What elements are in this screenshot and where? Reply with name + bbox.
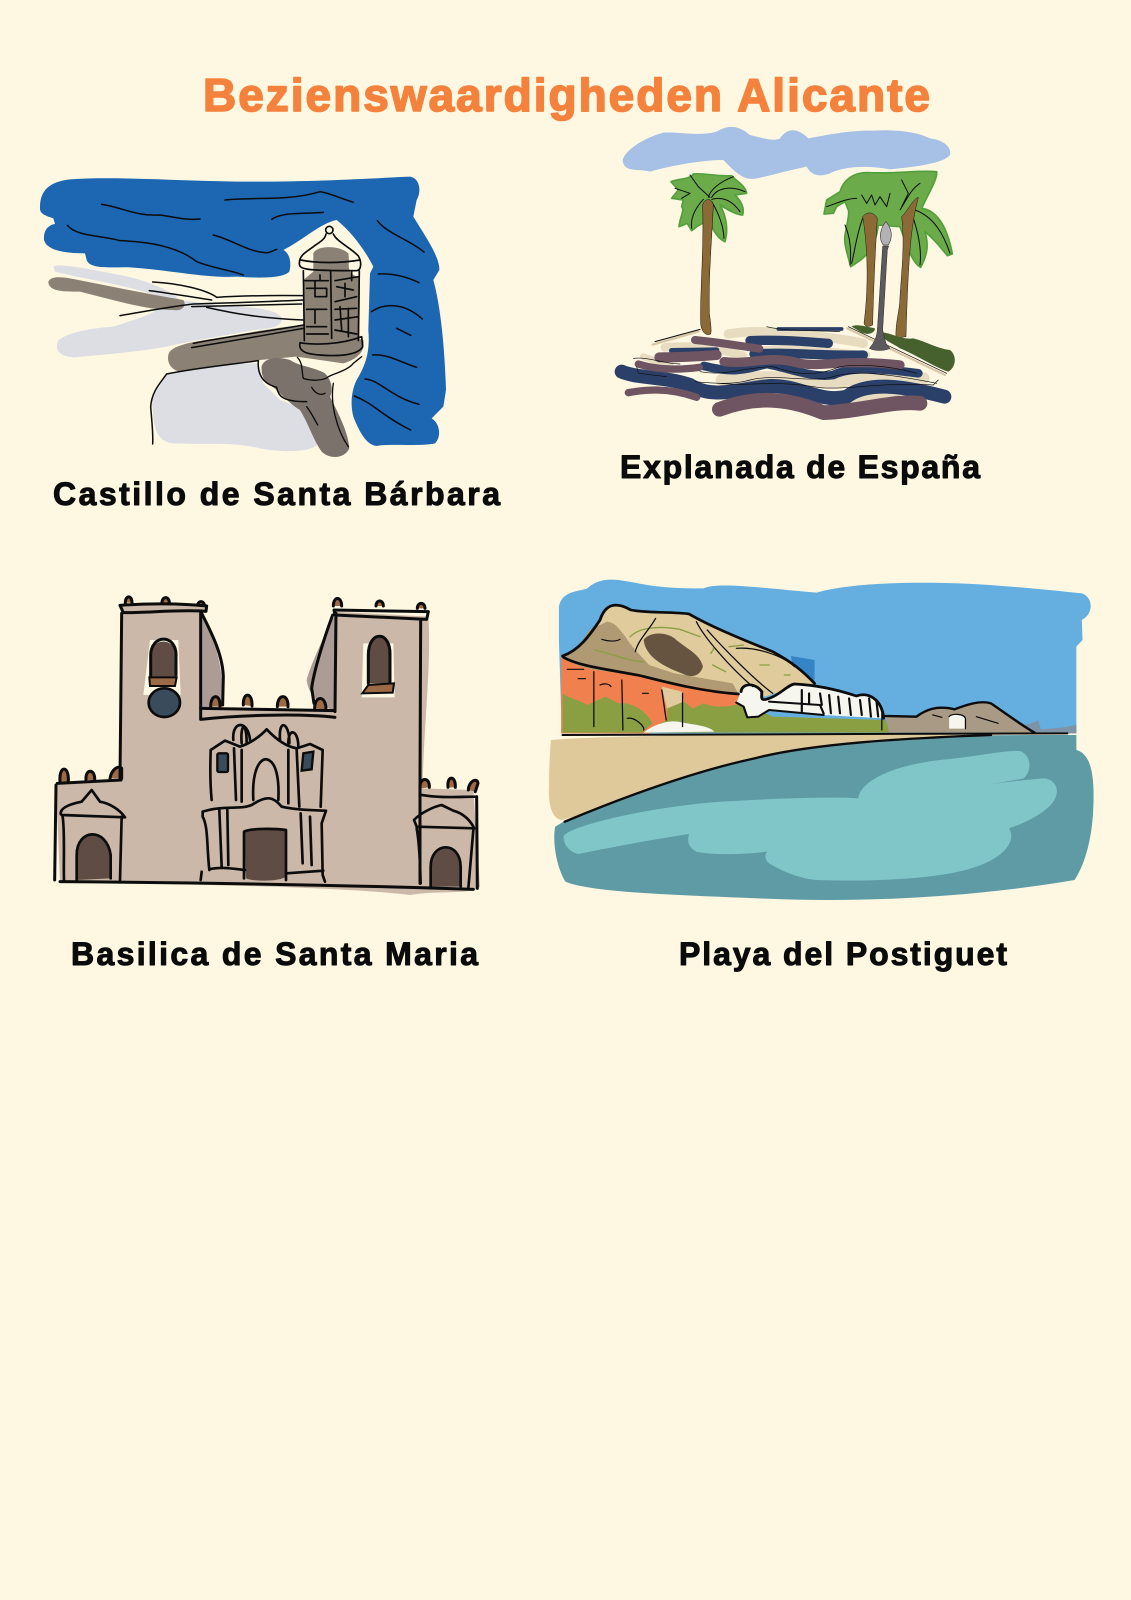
green brush marks [595, 627, 790, 675]
paving waves navy [622, 329, 944, 398]
hedge [852, 325, 955, 372]
pale grey wall strokes [53, 265, 318, 451]
rampart and cliff lines [120, 282, 307, 444]
watchtower body [303, 247, 360, 358]
white buildings [644, 684, 965, 733]
trunk left [863, 213, 877, 326]
light teal shallows [564, 751, 1057, 881]
cream gap in cliffs [662, 687, 684, 710]
fronds [671, 174, 747, 242]
sky brush lines [67, 192, 424, 430]
trunk right [896, 197, 918, 338]
right palms [824, 171, 955, 375]
finials [60, 597, 478, 792]
sky [559, 580, 1091, 733]
panel: Explanada de España illustration [622, 127, 955, 413]
panel: Playa del Postiguet illustration [549, 580, 1094, 900]
cave [644, 634, 703, 676]
sand [549, 734, 1005, 820]
side chapels [61, 790, 475, 888]
cream slope of rock [562, 605, 815, 697]
roof slopes [202, 615, 335, 712]
cliff underlay [561, 657, 744, 733]
deep blue behind ridge [791, 656, 815, 683]
ink outlines [563, 605, 1067, 822]
frond lines [827, 180, 950, 265]
street lamp [869, 222, 891, 350]
grey rock buttress [262, 358, 349, 457]
frond lines [675, 175, 745, 238]
kerb [847, 328, 945, 375]
taupe rampart strokes [48, 277, 364, 372]
label: Castillo de Santa Bárbara: Castillo de Santa Bárbara [53, 476, 500, 512]
distant city haze [1025, 721, 1076, 733]
far hills [885, 702, 1035, 733]
panel: Castillo de Santa Bárbara illustration [40, 177, 446, 457]
paving waves mauve [628, 340, 920, 413]
sea [554, 735, 1094, 900]
central portal [201, 725, 326, 882]
ink outlines [55, 604, 477, 889]
label: Playa del Postiguet: Playa del Postiguet [679, 936, 1007, 972]
label: Basilica de Santa Maria: Basilica de Santa Maria [71, 936, 478, 972]
left palm [671, 174, 747, 335]
tower outline and bricks [297, 226, 363, 447]
facade wash [56, 608, 480, 895]
title: Bezienswaardigheden Alicante [203, 69, 930, 121]
windows, door and rose window fills [77, 637, 461, 887]
trunk [701, 200, 713, 335]
green foreground [563, 693, 891, 733]
blue sky wash [40, 177, 446, 446]
label: Explanada de España: Explanada de España [620, 449, 980, 485]
brown rock shadow [562, 622, 738, 693]
paving waves cream [643, 332, 923, 402]
cloud [623, 127, 950, 179]
panel: Basilica de Santa Maria illustration [55, 597, 480, 895]
fronds [824, 171, 952, 267]
paving thin lines [633, 327, 938, 388]
